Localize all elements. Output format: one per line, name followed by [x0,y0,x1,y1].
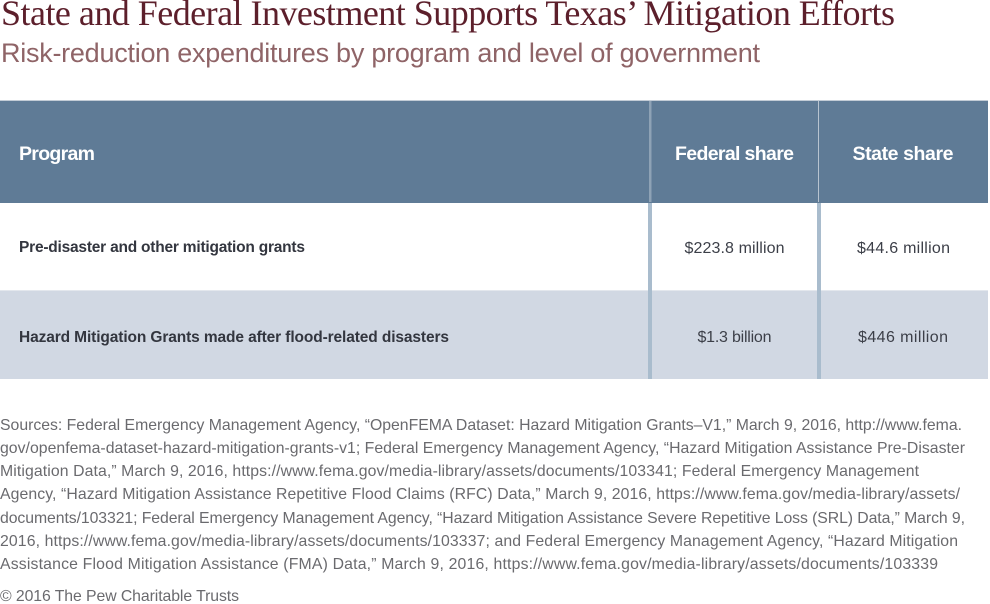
sources note: documents/103321; Federal Emergency Management Agency, “Hazard Mitigation Assistance Severe Repetitive Loss (SRL) Data,” March 9, [0,510,965,527]
sources note [0,417,965,573]
header: federal share: Federal share [675,143,794,165]
header: program: Program [19,143,95,165]
row: pre-disaster grants: $223.8 million [684,240,784,257]
header: state share: State share [852,143,954,165]
sources note: gov/openfema-dataset-hazard-mitigation-grants-v1; Federal Emergency Management Agency, “Hazard Mitigation Assistance Pre-Disaster [0,440,965,457]
row: hazard mitigation grants [0,290,988,379]
sources note: Mitigation Data,” March 9, 2016, https://www.fema.gov/media-library/assets/documents/103341; Federal Emergency Management [0,463,920,480]
sources note: 2016, https://www.fema.gov/media-library/assets/documents/103337; and Federal Emergency Management Agency, “Hazard Mitigation [0,533,958,550]
row: hazard mitigation grants: $446 million [858,329,948,346]
sources note: Agency, “Hazard Mitigation Assistance Repetitive Flood Claims (RFC) Data,” March 9, 2016, https://www.fema.gov/media-library/assets/ [0,486,961,503]
table [0,100,988,379]
subtitle: Risk-reduction expenditures by program and level of government [1,38,760,68]
row: pre-disaster grants [0,203,988,291]
sources note: Assistance Flood Mitigation Assistance (FMA) Data,” March 9, 2016, https://www.fema.gov/media-library/assets/documents/103339 [0,556,938,573]
row: hazard mitigation grants: Hazard Mitigation Grants made after flood-related disasters [19,329,449,346]
row: pre-disaster grants: $44.6 million [857,240,950,257]
row: pre-disaster grants: Pre-disaster and other mitigation grants [19,239,305,256]
table header row [0,100,988,203]
column dividers [648,203,821,379]
sources note: Sources: Federal Emergency Management Agency, “OpenFEMA Dataset: Hazard Mitigation Grants–V1,” March 9, 2016, http://www.fema. [0,417,962,434]
row: hazard mitigation grants: $1.3 billion [698,329,772,346]
